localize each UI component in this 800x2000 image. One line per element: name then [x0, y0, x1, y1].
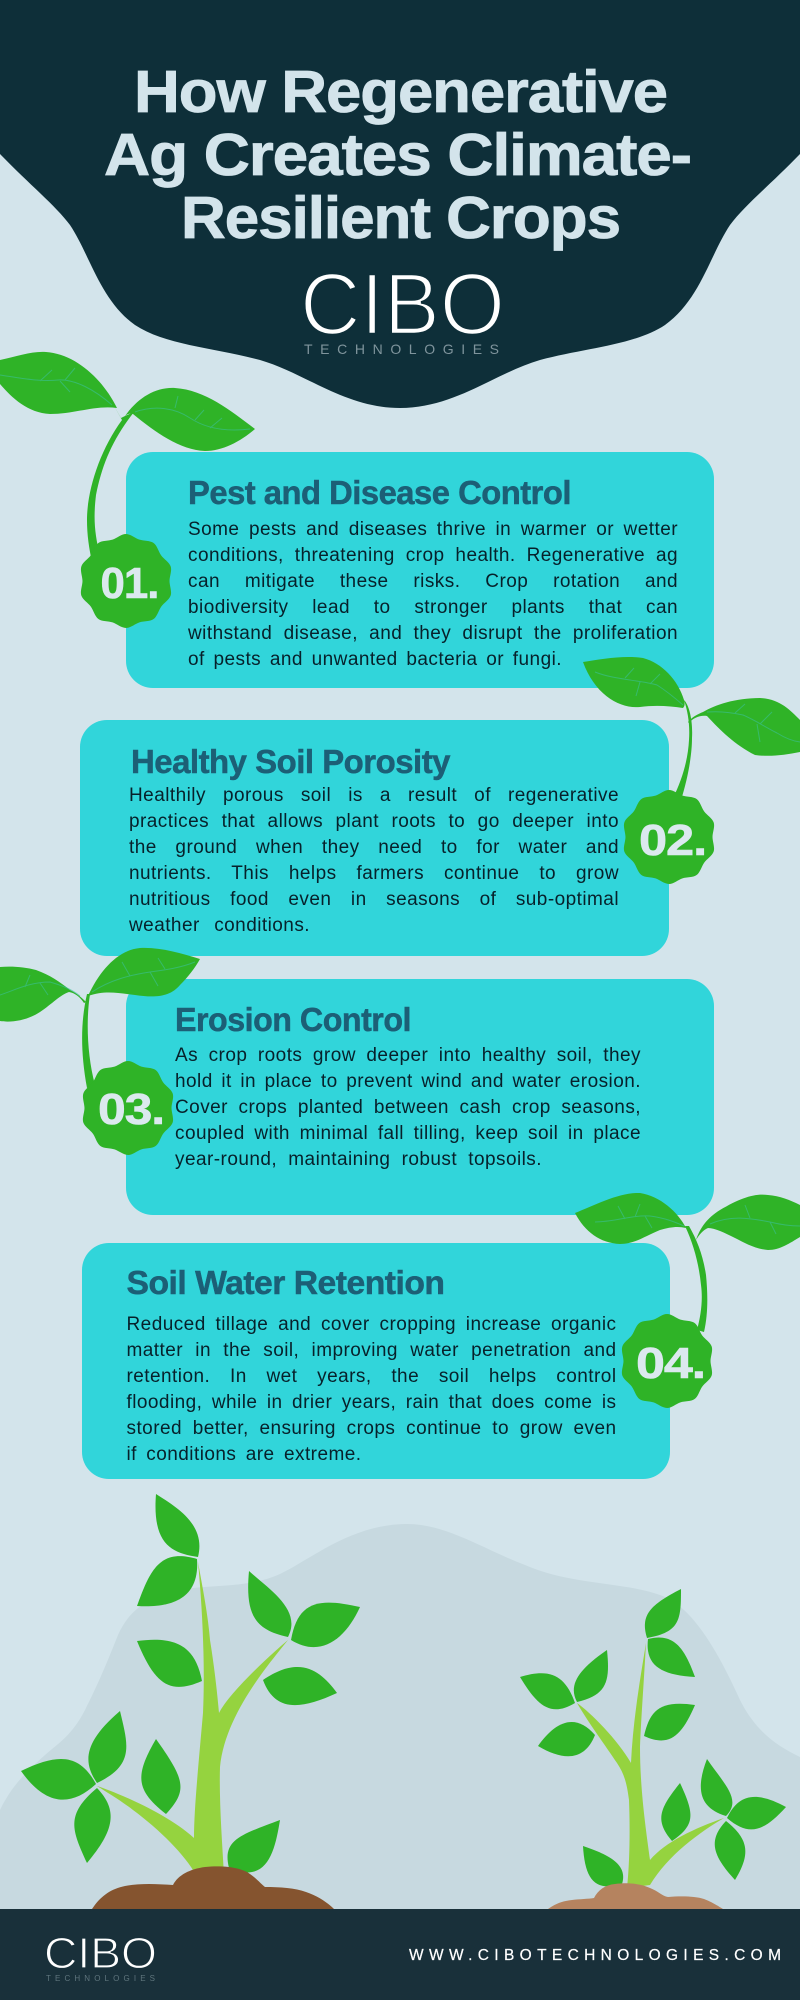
text: soil water retention body: matter in the soil, improving water penetration and: [126, 1340, 616, 1361]
text: pest and disease control body: biodiversity lead to stronger plants that can: [188, 597, 678, 618]
text: soil water retention body: [126, 1314, 616, 1465]
sprout and badge 02: 02.: [639, 816, 706, 865]
text: soil water retention body: if conditions are extreme.: [126, 1444, 362, 1465]
text: healthy soil porosity body: nutrients. This helps farmers continue to grow: [129, 863, 619, 884]
title: Ag Creates Climate-: [104, 122, 691, 188]
footer logo: CIBO Technologies: TECHNOLOGIES: [46, 1974, 155, 1983]
text: pest and disease control body: can mitigate these risks. Crop rotation and: [188, 571, 678, 592]
header logo: CIBO Technologies: TECHNOLOGIES: [304, 341, 499, 357]
heading: soil water retention: Soil Water Retention: [126, 1264, 444, 1301]
heading: healthy soil porosity: Healthy Soil Porosity: [131, 743, 451, 780]
sprout and badge 04: 04.: [636, 1339, 705, 1388]
sprout and badge 01: 01.: [100, 559, 158, 608]
title: How Regenerative: [134, 59, 667, 125]
header logo: CIBO Technologies: CIBO: [300, 256, 505, 353]
text: soil water retention body: flooding, while in drier years, rain that does come is: [126, 1392, 616, 1413]
text: pest and disease control body: [188, 519, 678, 670]
text: healthy soil porosity body: practices that allows plant roots to go deeper into: [129, 811, 619, 832]
footer website url: WWW.CIBOTECHNOLOGIES.COM: [409, 1947, 781, 1964]
footer logo: CIBO Technologies: CIBO: [44, 1929, 157, 1978]
text: erosion control body: hold it in place to prevent wind and water erosion.: [175, 1071, 641, 1092]
text: healthy soil porosity body: the ground when they need to for water and: [129, 837, 619, 858]
sprout and badge 03: 03.: [98, 1085, 164, 1134]
footer bar: [0, 1909, 800, 2000]
text: erosion control body: Cover crops planted between cash crop seasons,: [175, 1097, 641, 1118]
heading: pest and disease control: Pest and Disease Control: [188, 474, 571, 511]
panel: pest and disease control: [126, 452, 714, 688]
text: pest and disease control body: Some pests and diseases thrive in warmer or wetter: [188, 519, 678, 540]
text: soil water retention body: stored better, ensuring crops continue to grow even: [126, 1418, 616, 1439]
text: pest and disease control body: of pests and unwanted bacteria or fungi.: [188, 649, 562, 670]
text: soil water retention body: Reduced tillage and cover cropping increase organic: [126, 1314, 616, 1335]
text: pest and disease control body: conditions, threatening crop health. Regenerative ag: [188, 545, 678, 566]
text: healthy soil porosity body: nutritious food even in seasons of sub-optimal: [129, 889, 619, 910]
text: erosion control body: As crop roots grow deeper into healthy soil, they: [175, 1045, 641, 1066]
text: erosion control body: [175, 1045, 641, 1170]
text: pest and disease control body: withstand disease, and they disrupt the proliferation: [188, 623, 678, 644]
panel: healthy soil porosity: [80, 720, 669, 956]
heading: erosion control: Erosion Control: [175, 1001, 411, 1038]
text: soil water retention body: retention. In wet years, the soil helps control: [126, 1366, 616, 1387]
text: healthy soil porosity body: [129, 785, 619, 936]
text: erosion control body: coupled with minimal fall tilling, keep soil in place: [175, 1123, 641, 1144]
title: Resilient Crops: [181, 185, 620, 251]
text: healthy soil porosity body: weather conditions.: [129, 915, 310, 936]
panel: erosion control: [126, 979, 714, 1215]
text: healthy soil porosity body: Healthily porous soil is a result of regenerative: [129, 785, 619, 806]
text: erosion control body: year-round, maintaining robust topsoils.: [175, 1149, 542, 1170]
panel: soil water retention: [82, 1243, 670, 1479]
